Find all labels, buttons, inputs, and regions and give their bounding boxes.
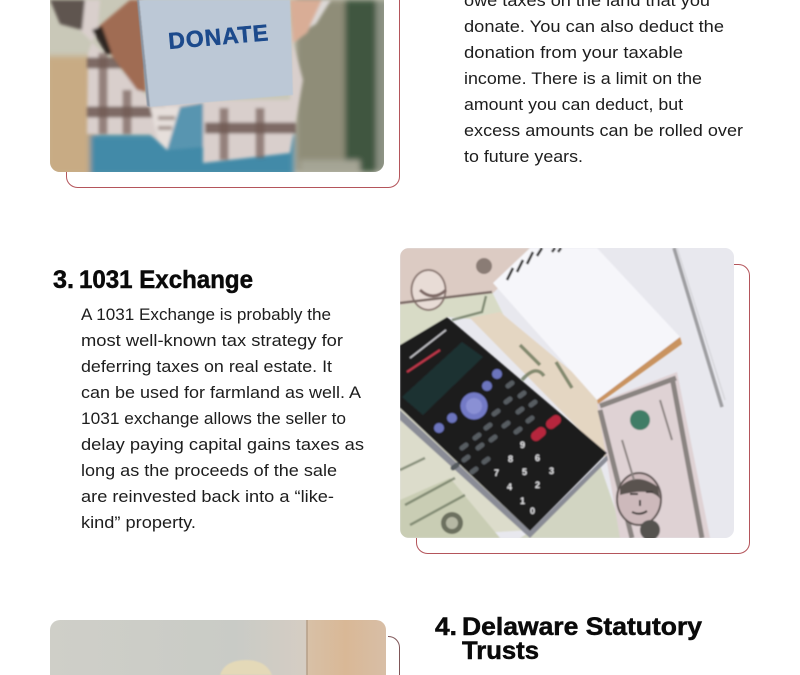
heading: 4. Delaware Statutory Trusts: Trusts xyxy=(462,637,539,665)
text block: section 2 body xyxy=(464,0,743,166)
panel: section 2 donation photo xyxy=(46,0,400,188)
photo: calculator, notepad, pen and dollar bills: 2 xyxy=(535,480,540,490)
pen xyxy=(674,248,722,407)
text block: section 3 body: A 1031 Exchange is probably the xyxy=(81,305,331,324)
photo: calculator, notepad, pen and dollar bills: 4 xyxy=(507,482,512,492)
text block: section 3 body: deferring taxes on real estate. It xyxy=(81,357,332,376)
text block: section 2 body: excess amounts can be rolled over xyxy=(464,121,743,140)
photo: calculator, notepad, pen and dollar bills: 3 xyxy=(549,466,554,476)
photo: calculator, notepad, pen and dollar bills: 1 xyxy=(520,496,525,506)
text block: section 3 body: are reinvested back into a “like- xyxy=(81,487,334,506)
red offset frame xyxy=(388,636,400,675)
text block: section 3 body: kind” property. xyxy=(81,513,196,532)
red offset frame xyxy=(416,264,750,554)
calculator xyxy=(400,410,608,538)
heading: 3. 1031 Exchange: 3. xyxy=(53,266,74,294)
text block: section 3 body xyxy=(81,305,364,532)
red offset frame xyxy=(66,0,400,188)
text block: section 3 body: delay paying capital gains taxes as xyxy=(81,435,364,454)
panel: section 4 photo xyxy=(50,620,400,675)
box label: DONATE: DONATE xyxy=(167,19,269,54)
bills xyxy=(400,248,540,305)
text block: section 3 body: long as the proceeds of the sale xyxy=(81,461,337,480)
photo: calculator, notepad, pen and dollar bills: 7 xyxy=(494,468,499,478)
text block: section 3 body: 1031 exchange allows the seller to xyxy=(81,409,346,428)
photo: calculator, notepad, pen and dollar bills: 5 xyxy=(522,467,527,477)
photo: room with blond figure xyxy=(50,620,386,675)
text block: section 2 body: donate. You can also deduct the xyxy=(464,17,724,36)
photo: calculator, notepad, pen and dollar bills: 0 xyxy=(530,506,535,516)
panel: section 3 calculator photo xyxy=(400,248,750,554)
photo: calculator, notepad, pen and dollar bills: 6 xyxy=(535,453,540,463)
photo: calculator, notepad, pen and dollar bills: 9 xyxy=(520,440,525,450)
photo: person holding donate box xyxy=(46,0,388,176)
notepad xyxy=(493,248,680,400)
photo: calculator, notepad, pen and dollar bills xyxy=(400,248,734,540)
five dollar bill xyxy=(597,372,710,538)
text block: section 3 body: most well-known tax strategy for xyxy=(81,331,343,350)
heading: 4. Delaware Statutory Trusts: Delaware Statutory xyxy=(462,613,702,641)
text block: section 2 body: income. There is a limit on the xyxy=(464,69,702,88)
heading: 3. 1031 Exchange: 1031 Exchange xyxy=(79,266,253,294)
photo: calculator, notepad, pen and dollar bills: 8 xyxy=(508,454,513,464)
text block: section 2 body: amount you can deduct, but xyxy=(464,95,683,114)
heading: 4. Delaware Statutory Trusts xyxy=(435,613,702,665)
text block: section 2 body: to future years. xyxy=(464,147,583,166)
donate box xyxy=(137,0,293,107)
text block: section 2 body: donation from your taxable xyxy=(464,43,683,62)
heading: 4. Delaware Statutory Trusts: 4. xyxy=(435,613,457,641)
text block: section 3 body: can be used for farmland as well. A xyxy=(81,383,362,402)
